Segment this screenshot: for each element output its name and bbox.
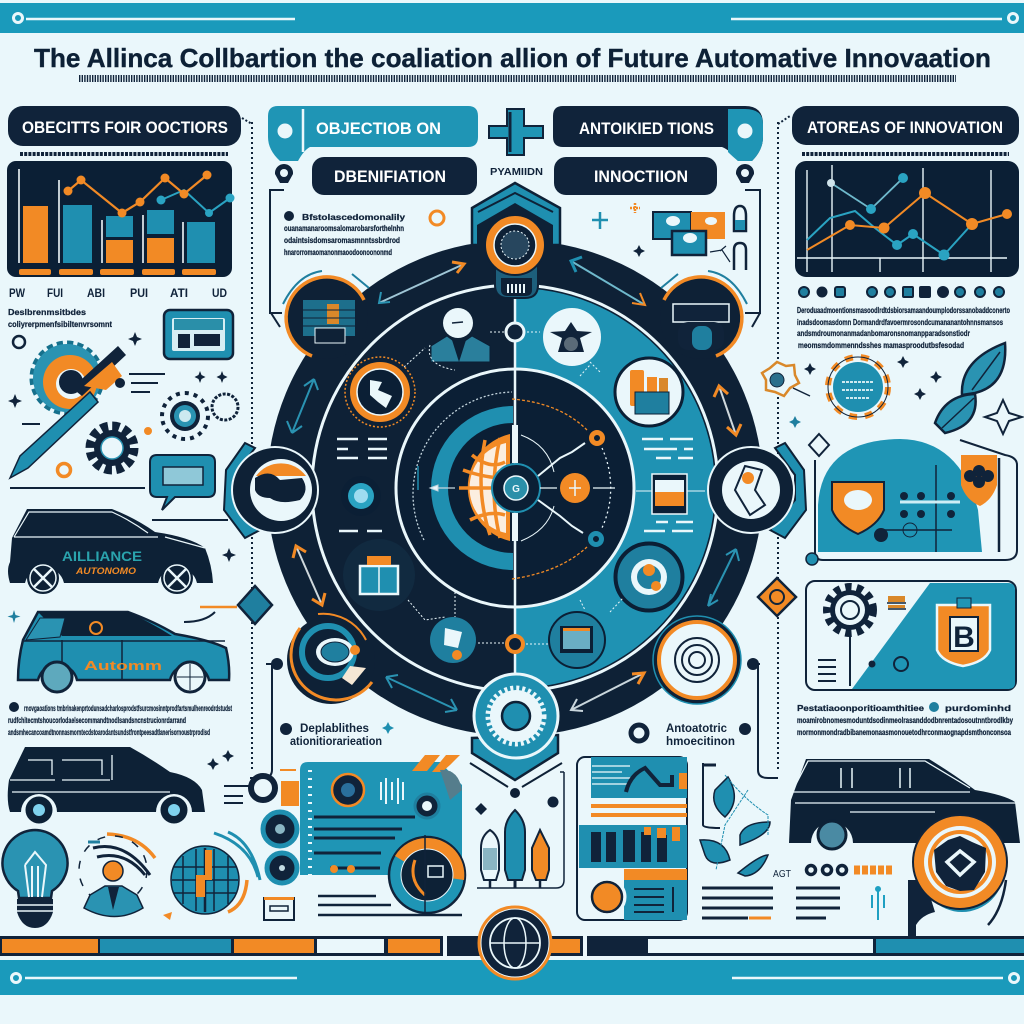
text block: centre upper: hnarorromaomanonmaoodoonoononmd xyxy=(284,247,392,257)
panel: badge B: B xyxy=(953,621,975,654)
car: teal with alliance lettering: Automm xyxy=(84,658,162,673)
panel: areas of innovation header: ATOREAS OF INNOVATION xyxy=(807,119,1003,137)
icon: donut chart xyxy=(389,835,465,915)
chart axis labels: ABI xyxy=(87,288,105,300)
bar chart xyxy=(7,161,234,277)
pyramid label: PYAMIIDN xyxy=(490,167,543,178)
panel: shield dashboard xyxy=(806,439,1017,565)
panel: areas of innovation header xyxy=(792,106,1019,145)
icon: dotted dial xyxy=(162,393,238,439)
icon: monitor xyxy=(164,310,233,359)
icon: star badge xyxy=(762,362,810,396)
panel: objectives header: OBECITTS FOIR OOCTIORS xyxy=(22,119,228,137)
icon: photo cards xyxy=(653,212,725,255)
arrow: lower right xyxy=(708,549,739,606)
icon: light bulb xyxy=(2,830,68,928)
icon: central plus xyxy=(489,109,543,155)
connector diamonds xyxy=(184,578,796,624)
arrow: top right xyxy=(571,257,645,305)
orange globe xyxy=(459,434,510,541)
inner dark disc xyxy=(396,369,634,607)
panel: identification header: DBENIFIATION xyxy=(334,168,446,186)
node: bottom gear shield xyxy=(470,674,562,798)
top banner xyxy=(0,3,1024,33)
icon: leaves xyxy=(935,343,1005,433)
side dots xyxy=(271,658,759,670)
node: lower left magnifier xyxy=(287,614,375,704)
text block: centre upper xyxy=(284,211,405,257)
panel: identification header xyxy=(312,157,477,195)
icon: orange-white gear badge xyxy=(828,357,888,417)
hub xyxy=(492,464,540,512)
icon: left pin xyxy=(275,164,293,183)
arrow: bottom right xyxy=(571,673,644,711)
orange globe node xyxy=(345,357,415,427)
browser node xyxy=(549,612,605,668)
icon: flasks xyxy=(475,772,564,888)
camera node xyxy=(341,476,381,516)
panel: objectives header xyxy=(8,106,241,146)
panel: automated header xyxy=(553,106,763,161)
right text stubs xyxy=(642,439,693,531)
text block: chart caption: coliyrerpmenfsibiltenvrsomnt xyxy=(8,319,112,329)
dark dial node xyxy=(614,542,684,612)
bottom banner xyxy=(0,957,1024,995)
icon: grid globe xyxy=(163,832,260,920)
lines under legend xyxy=(702,888,840,918)
panel: objection header xyxy=(268,106,478,161)
panel: automated header: ANTOIKIED TIONS xyxy=(579,120,714,138)
car: black van lower right xyxy=(789,759,1020,849)
tree node xyxy=(430,617,476,663)
node: top gauge xyxy=(472,183,560,298)
dashed inner orbit xyxy=(413,392,512,540)
text block: left lower: rnovgaoations tmbrinakenprtodunsadcharlosprodstfsurcmosinntprodfartsmulhenreodrdstudst xyxy=(24,703,232,713)
icon: small ring xyxy=(13,336,25,348)
panel: report card xyxy=(577,757,687,920)
icon: gear and pencil xyxy=(10,344,126,478)
chart axis labels: UD xyxy=(212,288,227,300)
chart axis labels: FUI xyxy=(47,288,63,300)
person node xyxy=(431,308,490,362)
car: black with alliance lettering: AILLIANCE xyxy=(62,548,142,564)
text block: chart caption: Deslbrenmsitbdes xyxy=(8,307,86,317)
text block: right lower xyxy=(797,702,1013,737)
teal right half xyxy=(515,288,715,688)
lines under dashboard xyxy=(318,896,462,915)
bottom color bar xyxy=(0,936,1024,956)
outer dark disc xyxy=(267,240,763,736)
car: black van lower left xyxy=(8,747,205,822)
fine print under areas header xyxy=(802,152,1009,156)
white spine highlight xyxy=(512,425,518,541)
node: upper left table xyxy=(283,271,369,359)
orange nodes xyxy=(560,432,602,544)
icon: hanging leaves xyxy=(700,763,770,876)
text block: left lower xyxy=(8,702,232,737)
node: right earth xyxy=(708,443,806,538)
icon: plus and star xyxy=(592,203,645,257)
text block: right upper xyxy=(797,305,1010,350)
arrow: right xyxy=(714,386,741,435)
left text stubs xyxy=(337,439,387,531)
text block: centre upper: ouanamanaroomsalomarobarsforthelnhn xyxy=(284,223,404,233)
legend row xyxy=(773,866,893,880)
icon: sparkles left xyxy=(8,332,236,623)
text block: centre upper: odaintsisdomsaromasmnntssbrdrod xyxy=(284,235,400,245)
centre labels: Antoatotric xyxy=(666,723,728,735)
icon: sparkles right xyxy=(789,356,1022,434)
icon: orange dots xyxy=(58,428,152,476)
arrow: lower left xyxy=(293,546,325,605)
book node xyxy=(343,539,415,611)
circular arrows xyxy=(287,257,741,712)
legend dots xyxy=(799,287,1004,297)
central connectors xyxy=(250,190,778,778)
dotted column dividers xyxy=(242,116,790,770)
icon: dark gear xyxy=(91,427,133,469)
icon: speech bubble xyxy=(150,455,215,510)
icon: lens node and small marks xyxy=(207,750,299,806)
main circular diagram xyxy=(267,240,763,736)
icon: document tag xyxy=(264,897,294,920)
icon: outline diamond xyxy=(809,434,829,456)
text block: left lower: rudfchitecmtshoucorlodaelsecommandtnodlsandsncnstrucionrdarrand xyxy=(8,715,186,725)
decorative speed lines xyxy=(10,374,228,520)
car: black with alliance lettering xyxy=(8,509,213,593)
text block: right upper: meomsmdommenndsshes mamasproodutbsfesodad xyxy=(798,340,964,350)
left pointer xyxy=(418,466,455,491)
panel: innovation header: INNOCTIION xyxy=(594,168,688,186)
title: The Allinca Collbartion the coaliation allion of Future Automative Innovaation xyxy=(34,43,991,73)
centre labels: hmoecitinon xyxy=(666,736,735,748)
hub: G xyxy=(512,484,520,495)
chart axis labels xyxy=(9,288,227,300)
top spine ring xyxy=(506,323,524,341)
centre labels: ationitiorarieation xyxy=(290,736,382,748)
teal half ring xyxy=(431,406,513,570)
node: left earth xyxy=(224,443,318,538)
vertical spine xyxy=(514,290,516,686)
icon: large orange badge xyxy=(908,815,1007,937)
text block: left lower: andsmhecancoamdtnonnasmorntecdstoarodantsundstfrontpeesadtlanerisornoustrprodlsd xyxy=(8,727,210,737)
panel: objection header: OBJECTIOB ON xyxy=(316,120,441,138)
chart axis labels: ATI xyxy=(170,288,188,300)
panel: innovation header xyxy=(554,157,717,195)
hub connectors xyxy=(512,399,615,579)
screen card node xyxy=(636,474,705,514)
outer white ring xyxy=(312,285,718,691)
car: black with alliance lettering: AUTONOMO xyxy=(75,566,136,576)
text block: chart caption xyxy=(8,307,112,329)
icon: small teal figure xyxy=(872,887,884,920)
white alliance node xyxy=(543,308,601,366)
icon: orange ring xyxy=(430,211,444,225)
arrow: left xyxy=(287,379,318,433)
bottom spine ring xyxy=(507,636,523,652)
node: upper right printer xyxy=(660,271,747,359)
icon: locks xyxy=(710,206,746,270)
line chart xyxy=(795,161,1019,277)
chart axis labels: PUI xyxy=(130,288,148,300)
text block: right lower: Pestatiaoonporitioamthitiee xyxy=(797,703,924,713)
car: teal with alliance lettering xyxy=(18,612,229,692)
panel: badge B xyxy=(806,581,1016,690)
text block: centre upper: Bfstolascedomonalily xyxy=(302,212,405,222)
text block: right lower: purdominhd xyxy=(945,703,1011,713)
icon: bottom globe xyxy=(479,907,551,979)
centre labels xyxy=(280,722,751,748)
icon: person with arcs xyxy=(79,834,155,916)
icon: right pin xyxy=(736,164,754,183)
fine print under objectives header xyxy=(20,152,228,156)
centre labels: Deplablithes xyxy=(300,723,369,735)
arrow: bottom left xyxy=(386,675,457,712)
dashed node connectors xyxy=(404,332,623,644)
node: lower right fingerprint xyxy=(653,616,741,704)
legend row: AGT xyxy=(773,869,791,880)
book stack node xyxy=(615,358,683,426)
chart axis labels: PW xyxy=(9,288,25,300)
panel: teal dashboard xyxy=(263,755,462,883)
arrow: top left xyxy=(379,262,464,303)
